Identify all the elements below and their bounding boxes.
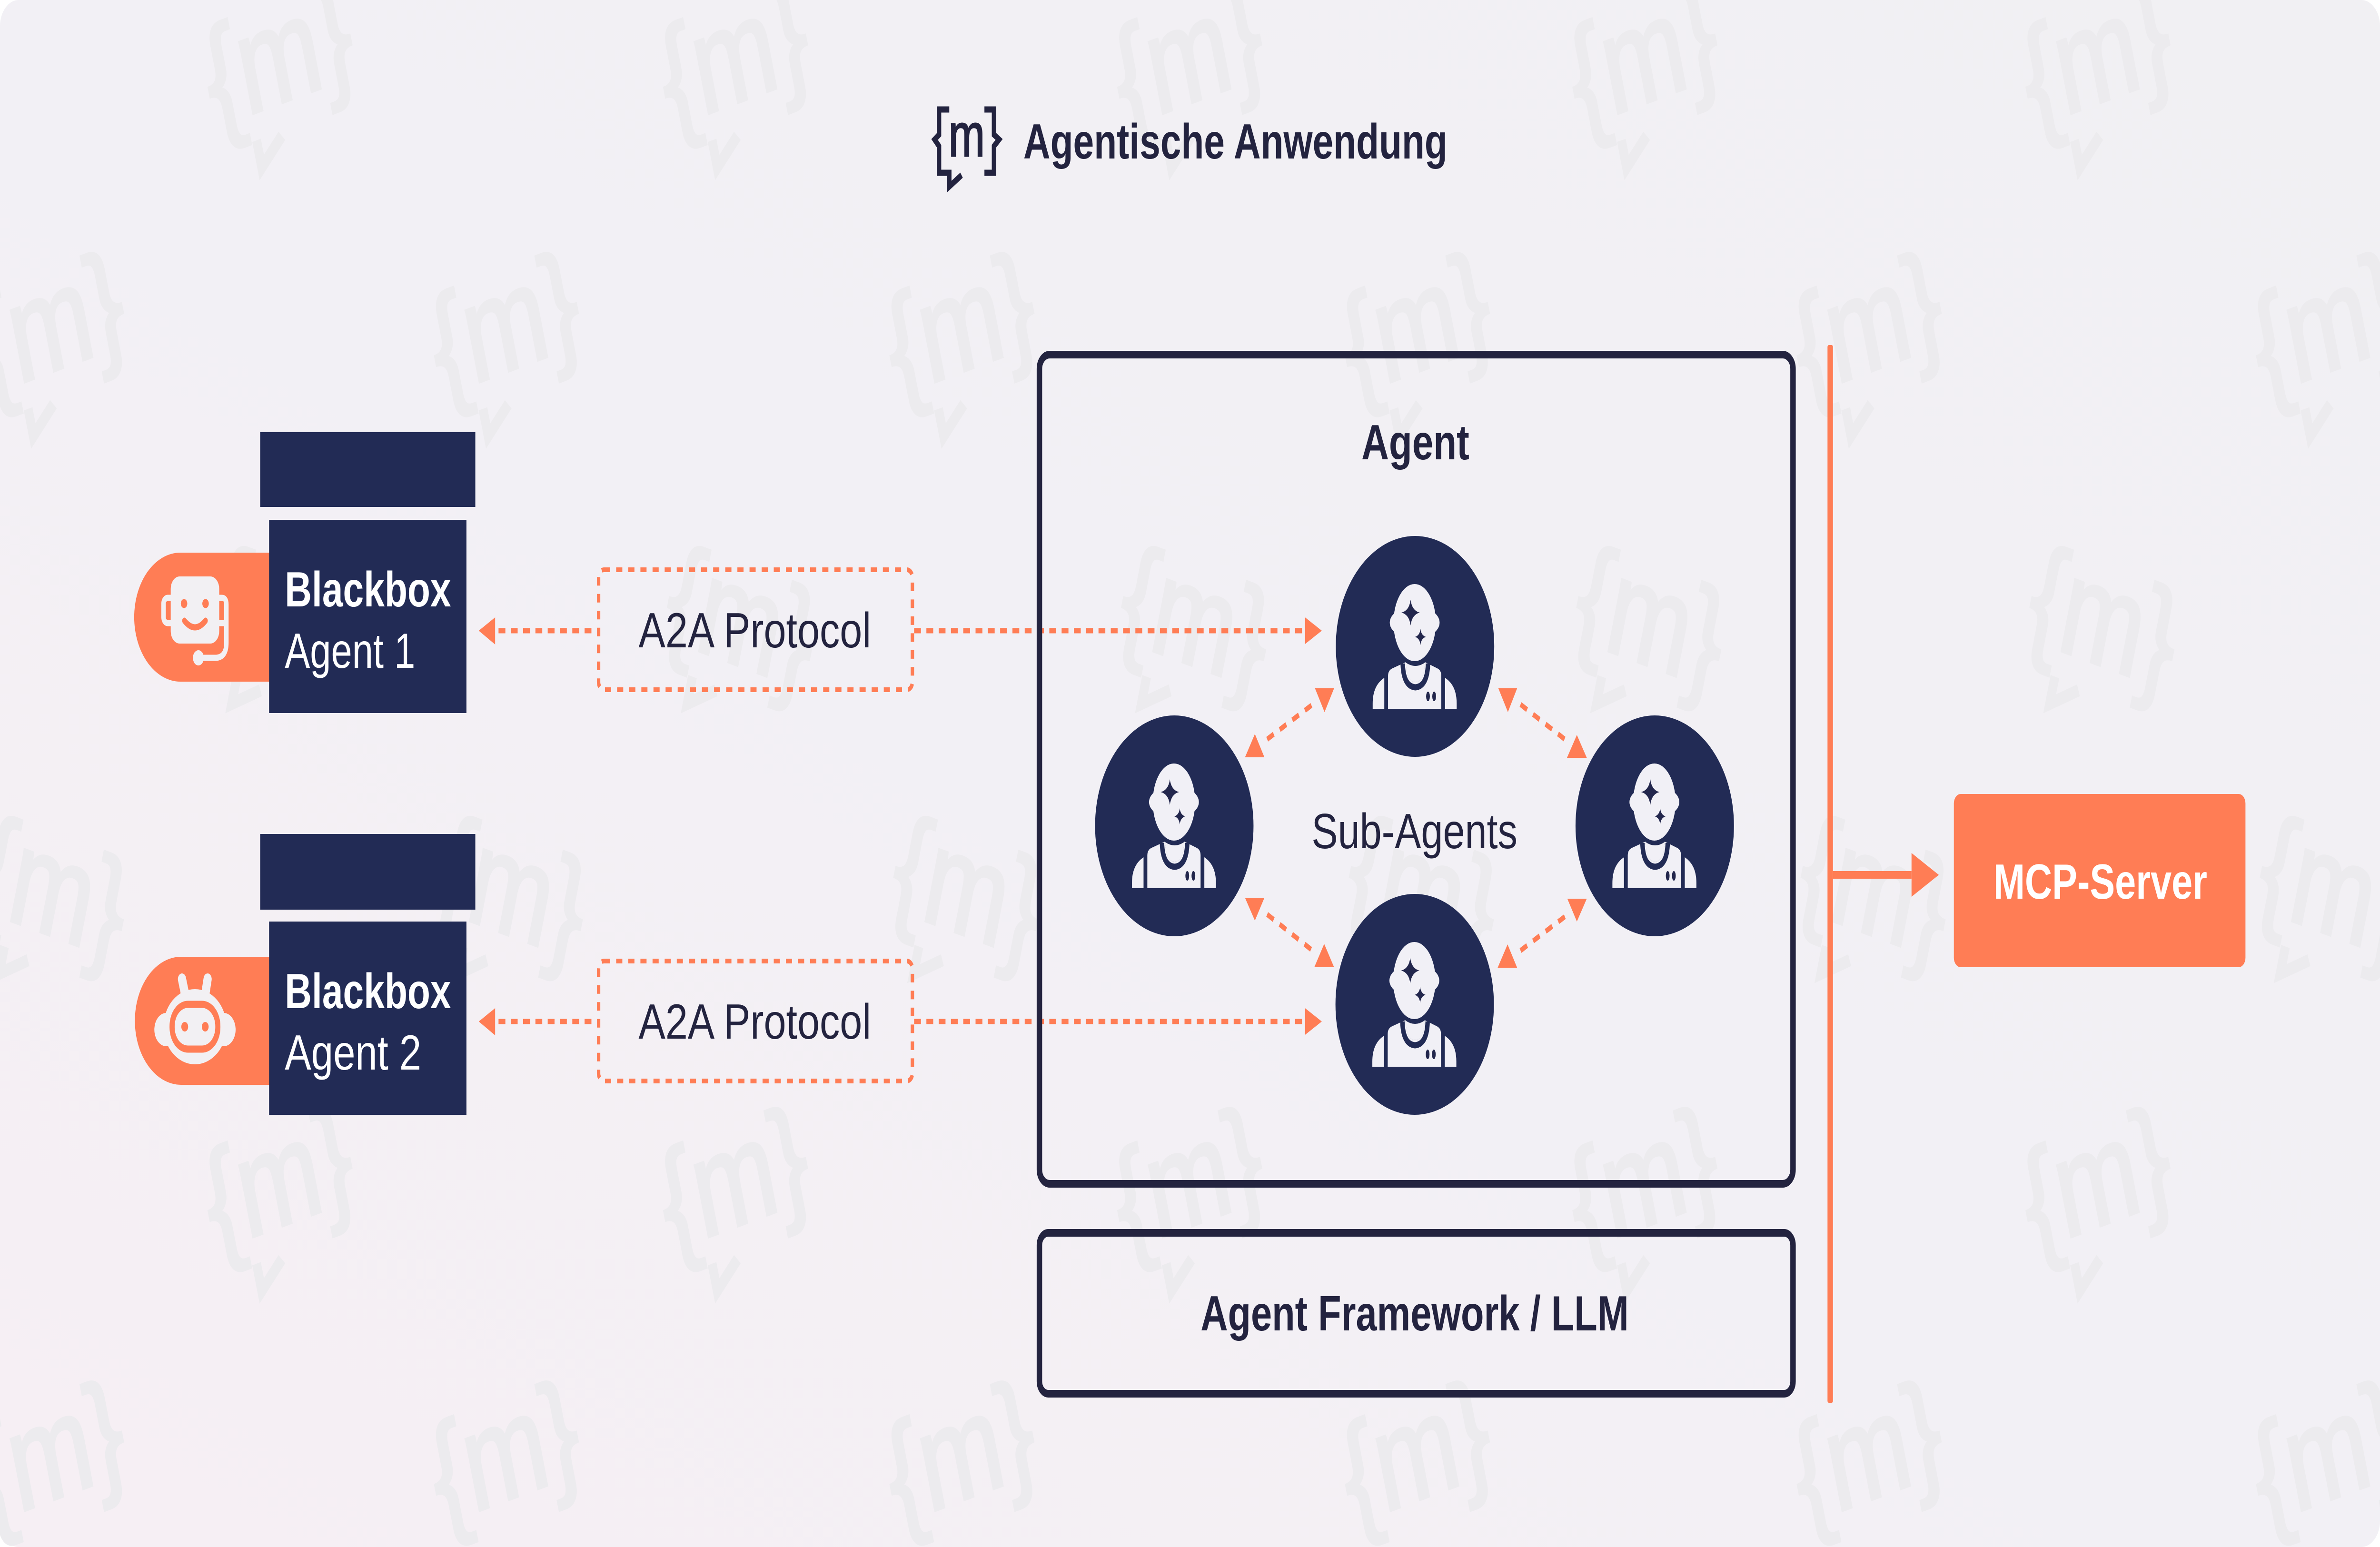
title: Agentische Anwendung xyxy=(1023,114,1448,169)
MCP-Server box xyxy=(1954,794,2245,967)
text: {m} xyxy=(418,222,590,424)
label: Sub-Agents: Sub-Agents xyxy=(1311,804,1517,859)
icon: robot xyxy=(154,979,236,1064)
sub-agent bottom xyxy=(1336,894,1494,1115)
text: {m} xyxy=(418,1351,590,1547)
label: MCP-Server xyxy=(1993,854,2207,910)
dark tab xyxy=(260,432,476,507)
panel: Blackbox Agent 1 xyxy=(134,432,476,713)
text: {m} xyxy=(1781,222,1953,424)
text: {m} xyxy=(2018,516,2190,718)
text: {m} xyxy=(1329,1351,1501,1547)
text: {m} xyxy=(1789,786,1962,988)
Blackbox card xyxy=(269,922,466,1115)
arrowhead xyxy=(479,1008,495,1035)
label: Blackbox xyxy=(285,964,451,1019)
A2A box xyxy=(599,961,912,1081)
text: {m} xyxy=(874,222,1046,424)
heading: Agent: Agent xyxy=(1361,415,1469,470)
text: {m} xyxy=(1110,516,1282,718)
arrow: right to bottom sub-agent xyxy=(1497,899,1587,968)
sub-agent right xyxy=(1576,715,1734,936)
label: Agent Framework / LLM xyxy=(1200,1286,1629,1341)
text: {m} xyxy=(1557,1077,1729,1279)
text: {m} xyxy=(647,1077,820,1279)
icon tab: agent 2 xyxy=(135,957,271,1085)
label: Agent 1 xyxy=(285,624,415,679)
arrow to MCP-Server xyxy=(1833,853,1939,897)
arrowhead xyxy=(1305,617,1322,644)
vertical connector line xyxy=(1827,345,1833,1403)
A2A connector 2 xyxy=(479,961,1322,1081)
sub-agent left xyxy=(1095,715,1253,936)
panel: Agent Framework / LLM xyxy=(1040,1233,1793,1394)
arrowhead xyxy=(1305,1008,1322,1035)
text: {m} xyxy=(1338,786,1509,988)
icon: headset bot xyxy=(164,576,227,665)
label: A2A Protocol xyxy=(638,603,871,658)
Blackbox card xyxy=(269,520,466,713)
text: {m} xyxy=(192,1077,364,1279)
text: {m} xyxy=(1565,516,1737,718)
A2A connector 1 xyxy=(479,570,1322,690)
text: {m} xyxy=(1781,1351,1953,1547)
label: Agent 2 xyxy=(285,1025,421,1081)
arrow: top to right sub-agent xyxy=(1498,688,1587,758)
text: {m} xyxy=(200,516,372,718)
arrow: top to left sub-agent xyxy=(1245,688,1334,757)
text: {m} xyxy=(2010,1077,2182,1279)
A2A box xyxy=(599,570,912,690)
dark tab xyxy=(260,834,476,910)
label: Blackbox xyxy=(285,562,451,617)
text: {m} xyxy=(655,516,828,718)
icon: logo: m xyxy=(949,101,985,169)
panel: Agent xyxy=(1040,355,1793,1184)
sub-agent top xyxy=(1336,536,1494,757)
text: {m} xyxy=(1329,222,1501,424)
panel: Blackbox Agent 2 xyxy=(135,834,476,1115)
icon tab: agent 1 xyxy=(134,553,271,682)
label: A2A Protocol xyxy=(638,994,871,1050)
icon: logo xyxy=(934,101,999,187)
arrow: left to bottom sub-agent xyxy=(1245,898,1334,967)
text: {m} xyxy=(426,786,599,988)
arrowhead xyxy=(479,617,495,645)
text: {m} xyxy=(874,1351,1046,1547)
text: {m} xyxy=(882,786,1054,988)
text: {m} xyxy=(1101,1077,1274,1279)
